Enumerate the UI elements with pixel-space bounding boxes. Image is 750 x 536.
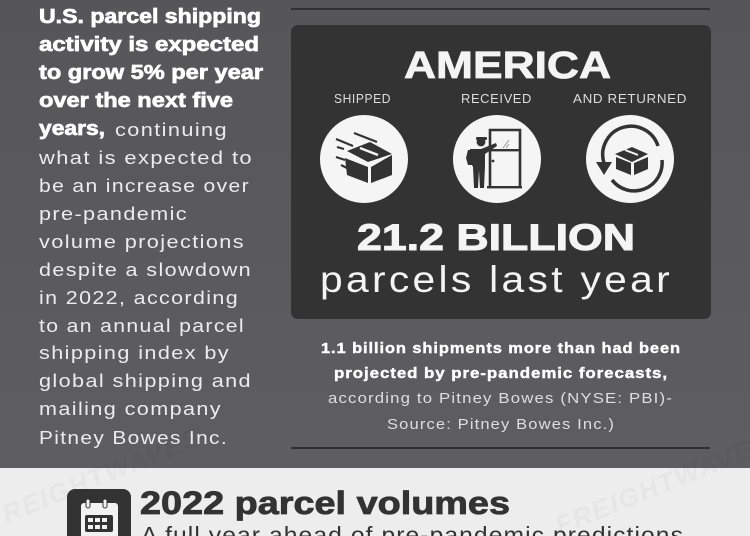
intro paragraph: activity is expected xyxy=(39,34,259,56)
icon: shipped box xyxy=(320,115,408,203)
intro paragraph: Pitney Bowes Inc. xyxy=(39,427,228,448)
subtitle: parcels last year xyxy=(320,259,673,300)
panel: America parcels xyxy=(291,25,711,319)
icon: calendar xyxy=(67,489,131,536)
source note xyxy=(321,341,681,433)
intro paragraph: continuing xyxy=(115,119,228,140)
bottom divider xyxy=(291,447,710,449)
intro paragraph: mailing company xyxy=(39,398,222,419)
big number: 21.2 BILLION xyxy=(357,217,635,258)
source note: 1.1 billion shipments more than had been xyxy=(321,341,681,357)
intro paragraph: shipping index by xyxy=(39,342,230,363)
intro paragraph: over the next five xyxy=(39,90,233,112)
heading: America: AMERICA xyxy=(404,45,611,87)
intro paragraph: to an annual parcel xyxy=(39,315,245,336)
intro paragraph: be an increase over xyxy=(39,175,250,196)
intro paragraph: U.S. parcel shipping xyxy=(39,6,261,28)
intro paragraph: volume projections xyxy=(39,231,245,252)
icon: returned box xyxy=(586,115,674,203)
panel: 2022 parcel volumes xyxy=(0,422,750,536)
intro paragraph: years, xyxy=(39,118,105,140)
label: shipped: SHIPPED xyxy=(334,92,391,106)
label: and returned: AND RETURNED xyxy=(573,92,687,106)
heading: 2022 parcel volumes: 2022 parcel volumes xyxy=(140,485,510,521)
source note: projected by pre-pandemic forecasts, xyxy=(334,366,668,382)
top divider xyxy=(291,8,710,10)
source note: according to Pitney Bowes (NYSE: PBI)- xyxy=(328,391,673,407)
intro paragraph: what is expected to xyxy=(38,147,253,168)
intro paragraph: in 2022, according xyxy=(39,287,239,308)
label: received: RECEIVED xyxy=(461,92,532,106)
intro paragraph: despite a slowdown xyxy=(39,259,252,280)
intro paragraph: pre-pandemic xyxy=(39,203,188,224)
intro paragraph: to grow 5% per year xyxy=(39,62,263,84)
intro paragraph: global shipping and xyxy=(39,370,252,391)
icon: person at door xyxy=(453,115,541,203)
source note: Source: Pitney Bowes Inc.) xyxy=(387,417,615,433)
watermark: bottom band xyxy=(0,422,750,536)
intro paragraph xyxy=(38,6,263,448)
